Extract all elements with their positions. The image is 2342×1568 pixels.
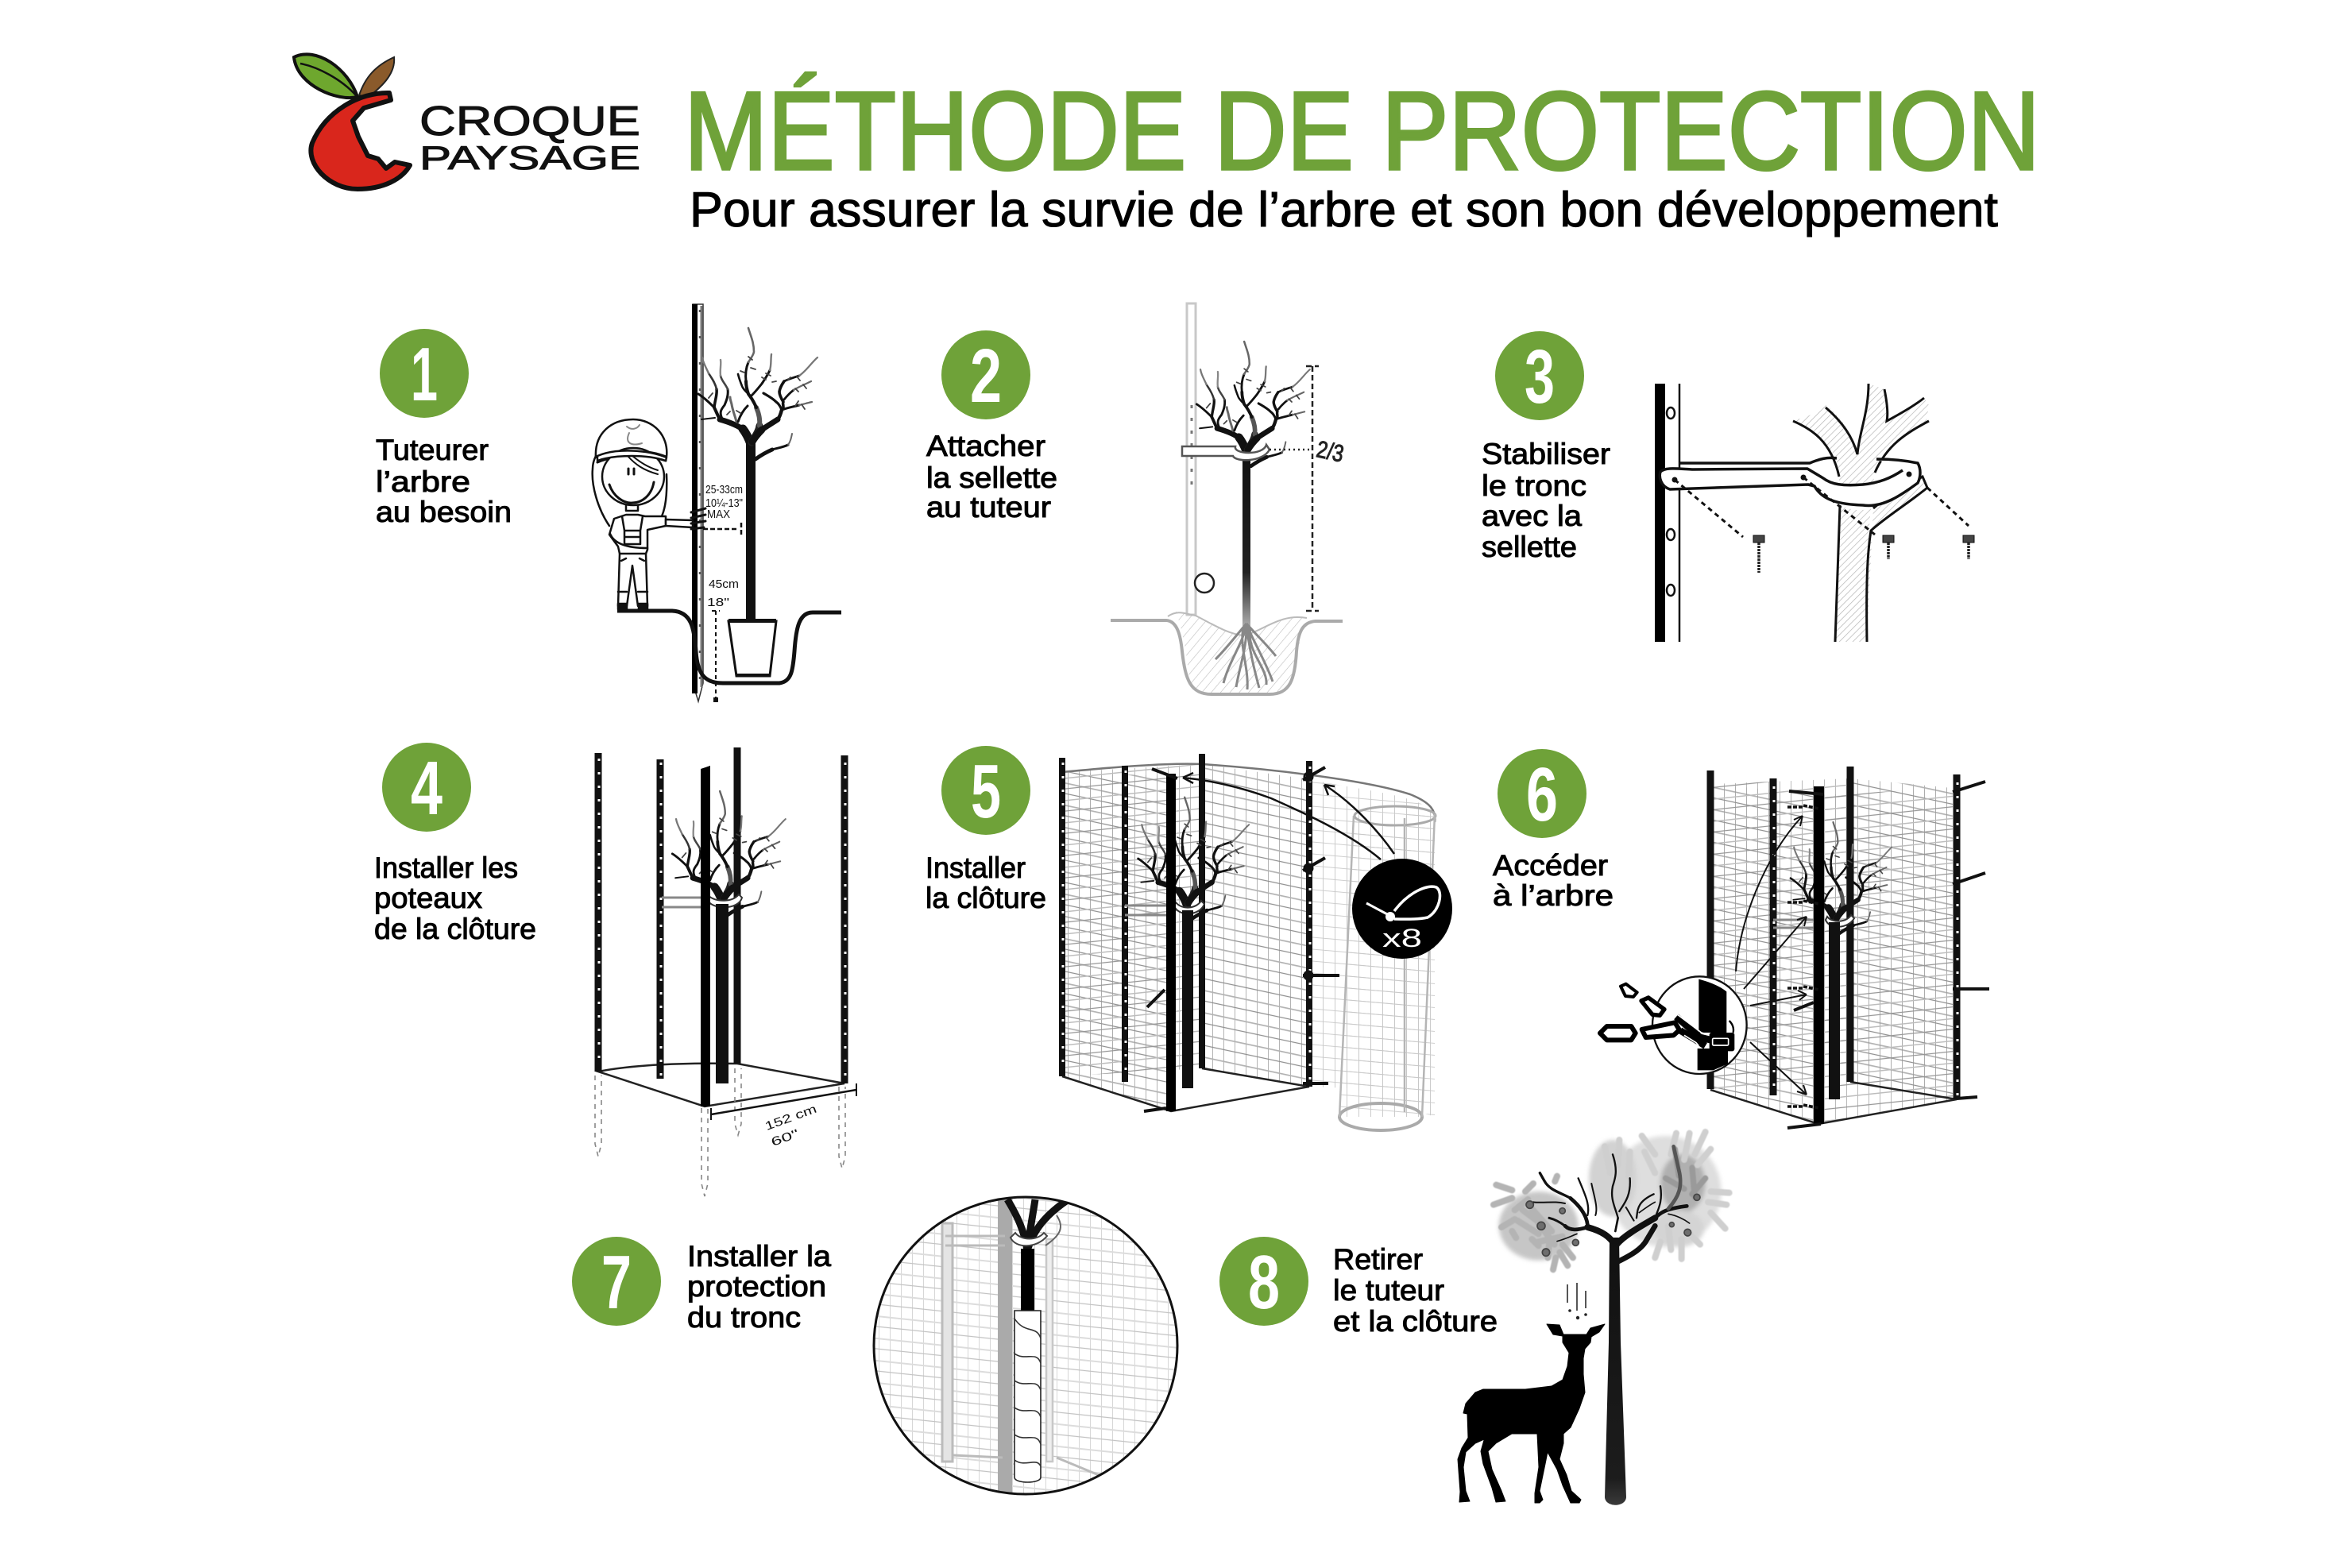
screws with dashed guides: [1675, 477, 1974, 573]
icon: leaf: [294, 54, 357, 98]
panel: step 8: [1219, 1132, 1729, 1505]
panel: step 7: [572, 1195, 1177, 1497]
tree with roots: [1196, 342, 1310, 689]
fence posts: [1710, 767, 1957, 1099]
dimension 152 cm: [711, 1083, 856, 1149]
step 8 text: et la clôture: [1333, 1305, 1498, 1338]
step 8 text: [1333, 1243, 1498, 1338]
tie badge x8: [1352, 859, 1452, 959]
number badge 5: [941, 746, 1030, 835]
icon: bitten apple: [311, 93, 410, 189]
fruit: [1526, 1194, 1700, 1256]
panel: step 6: [1493, 749, 1989, 1128]
two-thirds height marker: 2/3: [1314, 436, 1346, 468]
branches: [1533, 1146, 1690, 1261]
step 3 text: [1482, 438, 1610, 563]
step 4 text: poteaux: [374, 882, 483, 914]
step 6 text: à l’arbre: [1493, 879, 1614, 912]
dimension 152 cm: 60": [769, 1127, 801, 1149]
planting hole: [617, 611, 841, 683]
step 6 text: Accéder: [1493, 849, 1608, 882]
step 8 text: le tuteur: [1333, 1274, 1444, 1307]
inset: chain on post: [1600, 976, 1747, 1074]
step 3 text: sellette: [1482, 531, 1577, 563]
deer silhouette: [1458, 1324, 1605, 1503]
step 5 text: Installer: [926, 852, 1026, 884]
number badge 2: 2: [970, 334, 1002, 419]
stake: [1187, 303, 1214, 615]
number badge 5: 5: [971, 749, 1001, 834]
trunk: [1605, 1238, 1626, 1505]
dimension labels: 10¼-13": [705, 496, 743, 510]
number badge 7: [572, 1237, 661, 1326]
dimension labels: 45cm: [709, 577, 739, 591]
step 1 text: au besoin: [376, 496, 512, 528]
two-thirds height marker: [1270, 366, 1346, 611]
subtitle: Pour assurer la survie de l’arbre et son bon développement: [690, 183, 1998, 238]
saddle tie: [1182, 445, 1270, 460]
logo word: Croque: CROQUE: [419, 98, 640, 145]
step 7 text: du tronc: [687, 1301, 801, 1334]
number badge 7: 7: [601, 1240, 632, 1325]
dimension labels: 25-33cm: [705, 483, 743, 496]
number badge 4: [382, 743, 471, 832]
step 3 text: Stabiliser: [1482, 438, 1610, 470]
gardener character: [593, 419, 705, 609]
tree and stake: [1773, 786, 1892, 1124]
panel: step 5: [926, 746, 1452, 1130]
step 7 text: protection: [687, 1270, 826, 1303]
saddle bracket: [1660, 458, 1920, 506]
tie badge x8: x8: [1382, 924, 1422, 952]
foliage: [1494, 1132, 1729, 1269]
tree and stake: [1125, 774, 1249, 1111]
hatched trunk and branches: [1793, 384, 1929, 642]
number badge 6: [1498, 749, 1586, 838]
step 2 text: la sellette: [926, 462, 1057, 494]
number badge 8: 8: [1248, 1240, 1280, 1325]
tree in pot: [698, 328, 817, 677]
step 1 text: Tuteurer: [376, 434, 489, 466]
step 3 text: le tronc: [1482, 469, 1586, 502]
number badge 3: [1495, 331, 1584, 420]
dimension labels: [703, 483, 743, 702]
step 7 text: [687, 1240, 831, 1334]
wire mesh panels: [1062, 764, 1435, 1117]
step 3 text: avec la: [1482, 500, 1582, 532]
ground square and dashed anchors: [595, 1064, 845, 1196]
number badge 4: 4: [411, 746, 443, 831]
magnified circle with trunk wrap: [874, 1195, 1177, 1497]
step 1 text: [376, 434, 512, 528]
falling motion marks: [1567, 1283, 1587, 1319]
step 6 text: [1493, 849, 1614, 912]
panel: step 3: [1482, 331, 1974, 642]
post with holes: [1655, 384, 1679, 642]
fence posts: [598, 747, 845, 1083]
title: MÉTHODE DE PROTECTION: [684, 68, 2040, 193]
step 7 text: Installer la: [687, 1240, 831, 1273]
step 8 text: Retirer: [1333, 1243, 1423, 1276]
hole with hatching: [1111, 612, 1343, 694]
wire mesh enclosure: [1710, 778, 1957, 1124]
mesh roll: [1339, 806, 1436, 1130]
tree and stake: [662, 766, 786, 1106]
dimension labels: 18": [707, 596, 729, 609]
panel: step 1: [376, 304, 841, 702]
fence posts: [1062, 754, 1310, 1087]
dimension 152 cm: 152 cm: [763, 1103, 818, 1134]
number badge 6: 6: [1526, 752, 1558, 837]
fruit tree: foliage, branches, fruit and trunk: [1494, 1132, 1729, 1505]
number badge 8: [1219, 1237, 1308, 1326]
cable ties: [1144, 767, 1339, 1111]
number badge 2: [941, 330, 1030, 419]
logo word: Paysage: PAYSAGE: [419, 139, 640, 176]
step 1 text: l’arbre: [376, 465, 470, 498]
ties and small chains: [1787, 782, 1989, 1128]
dimension labels: MAX: [707, 508, 730, 521]
icon: stem: [359, 57, 394, 97]
arrows from tie badge: [1183, 773, 1394, 859]
step 4 text: Installer les: [374, 852, 518, 884]
step 2 text: au tuteur: [926, 491, 1051, 523]
stake: [692, 304, 703, 701]
step 5 text: la clôture: [926, 882, 1046, 914]
arrows to chains: [1736, 816, 1807, 1095]
panel: step 2: [926, 303, 1346, 694]
step 4 text: [374, 852, 536, 945]
panel: step 4: [374, 743, 856, 1196]
number badge 1: [380, 329, 469, 418]
number badge 1: 1: [411, 332, 438, 417]
logo: Croque Paysage: [294, 54, 640, 189]
step 4 text: de la clôture: [374, 913, 536, 945]
number badge 3: 3: [1525, 334, 1555, 419]
step 2 text: Attacher: [926, 430, 1045, 462]
step 2 text: [926, 430, 1057, 523]
step 5 text: [926, 852, 1046, 914]
